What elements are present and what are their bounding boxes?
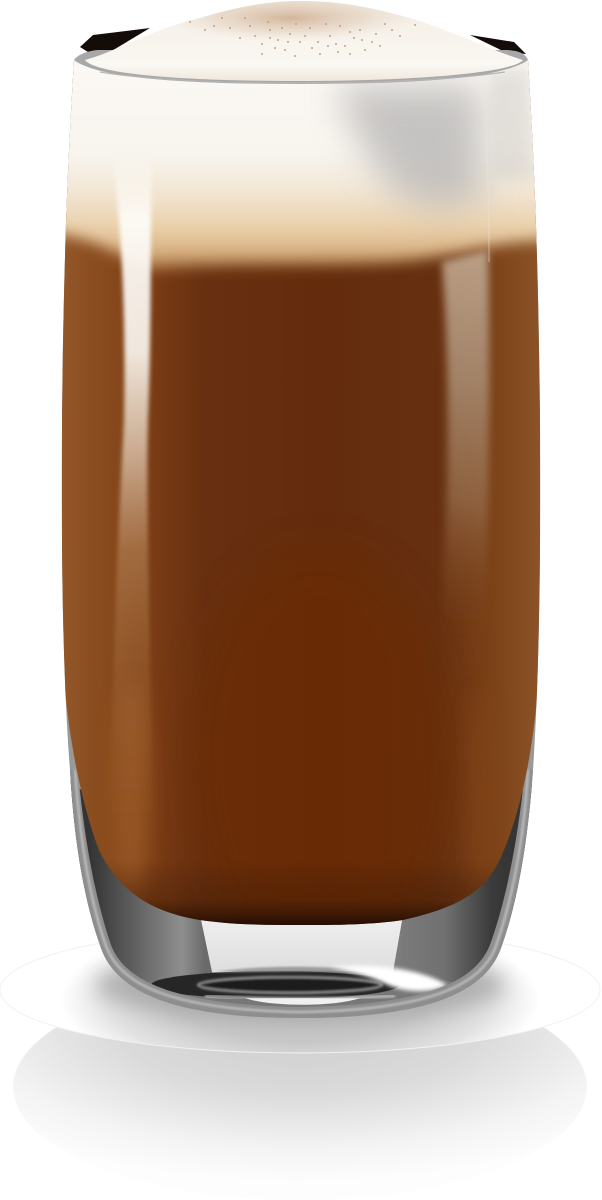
glass body [50, 50, 550, 1030]
right edge reflection column [490, 66, 536, 180]
lower left glow [114, 680, 150, 900]
lower right glow [466, 690, 494, 890]
liquid centre orange depth [214, 618, 426, 925]
glass rim line [100, 72, 505, 83]
clear centre of base [200, 915, 403, 972]
liquid and foam in the glass [62, 60, 540, 925]
shadow on the table [0, 927, 600, 1200]
foam body [66, 60, 536, 277]
right divider line [488, 204, 490, 262]
grey reflection in foam [335, 85, 484, 207]
bottom darkening [111, 869, 492, 925]
right liquid highlight [440, 250, 489, 640]
glass outer wall [70, 770, 533, 1018]
cocoa dust [189, 1, 416, 57]
base glass left [70, 780, 212, 995]
coffee liquid [60, 60, 542, 930]
white streak highlight left [114, 172, 154, 727]
base ellipse lens [149, 964, 452, 1009]
foam dome [74, 0, 528, 84]
base glass right [394, 784, 532, 1000]
black rim corners behind foam [80, 28, 526, 54]
